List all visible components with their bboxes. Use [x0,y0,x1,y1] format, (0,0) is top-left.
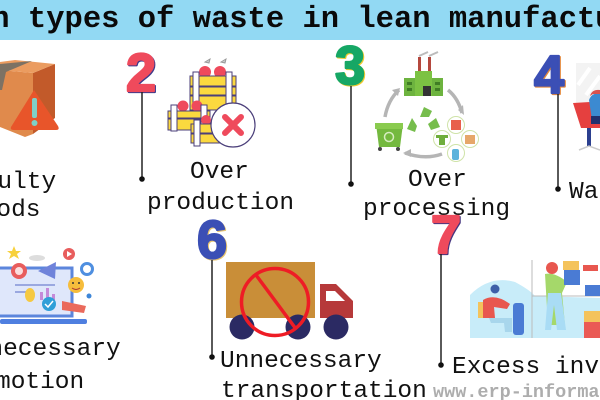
label: unnecessary transportation [220,348,427,400]
number 7: 7 [431,205,461,265]
number 7: 7 [432,206,462,266]
label: over production: Over [190,159,249,186]
label: over processing: Over [408,167,467,194]
number 3: 3 [335,36,365,96]
label: faulty goods [0,169,56,224]
number 3: 3 [336,37,366,97]
label: over processing [363,167,510,223]
label: unnecessary motion [0,336,121,396]
number 4: 4 [534,45,564,105]
pin line 6 [209,260,215,360]
label: unnecessary transportation: Unnecessary [220,348,382,375]
pin line 7 [438,254,444,368]
pin line 2 [139,92,145,182]
number 4: 4 [535,46,565,106]
icon: faulty goods box [0,60,59,137]
icon: unnecessary motion laptop [0,246,92,324]
icon: over production crates [168,59,255,147]
label: over production: production [147,190,294,217]
label: over processing: processing [363,196,510,223]
pin line 4 [555,94,561,192]
icon: excess inventory workers and boxes [470,260,600,338]
number 2: 2 [126,43,156,103]
label: over production [147,159,294,217]
icon: waiting person in chair [573,63,600,150]
icon: over processing recycling loop [375,52,478,162]
number 2: 2 [127,44,157,104]
icon: truck with prohibition sign [226,262,353,340]
number 6: 6 [197,210,227,270]
number 6: 6 [198,211,228,271]
pin line 3 [348,86,354,187]
